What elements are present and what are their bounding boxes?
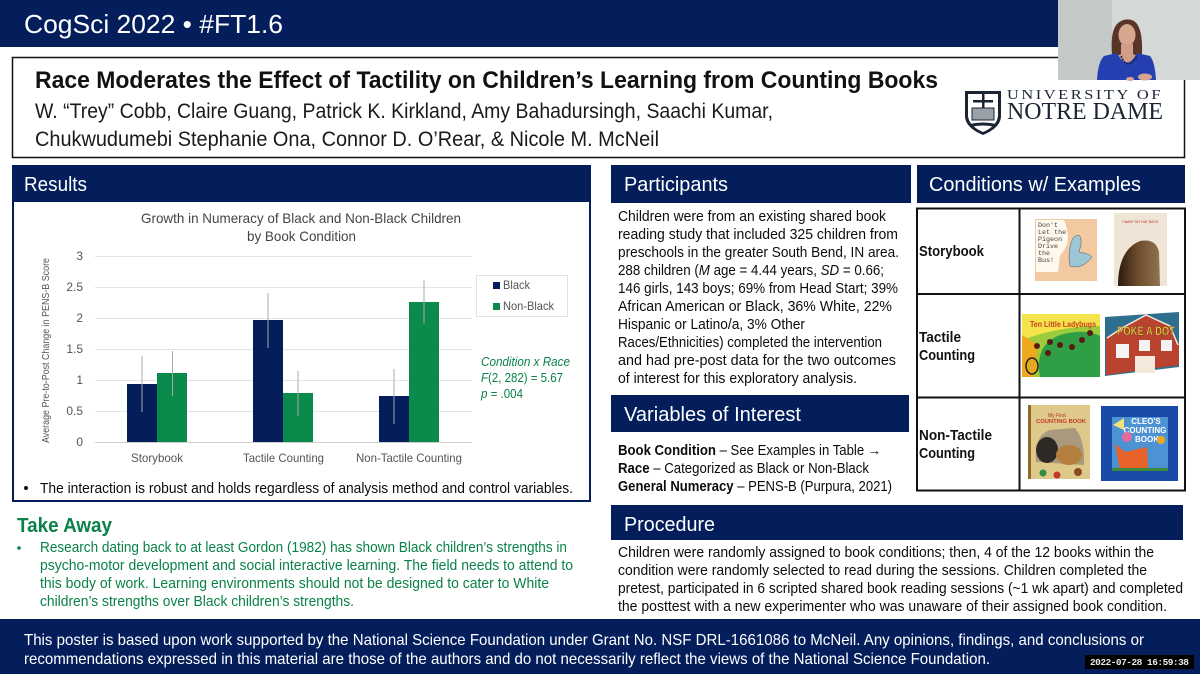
panel: conditions with examples xyxy=(917,165,1185,491)
participants text: Races/Ethnicities) completed the intervention xyxy=(618,335,882,351)
variables text: Book Condition – See Examples in Table → xyxy=(618,443,881,459)
participants header xyxy=(611,165,911,203)
book: pigeon: Don't xyxy=(1038,222,1058,230)
procedure header: Procedure xyxy=(624,514,715,536)
footer: recommendations expressed in this material are those of the authors and do not necessarily reflect the views of the National Science Foundation. xyxy=(24,651,990,668)
book: cleo's counting book: COUNTING xyxy=(1124,426,1166,435)
authors: W. “Trey” Cobb, Claire Guang, Patrick K. Kirkland, Amy Bahadursingh, Saachi Kumar, xyxy=(35,100,773,123)
variables header: Variables of Interest xyxy=(624,404,801,426)
authors: Chukwudumebi Stephanie Ona, Connor D. O’Rear, & Nicole M. McNeil xyxy=(35,128,659,151)
chart title: Growth in Numeracy of Black and Non-Black Children xyxy=(141,210,461,226)
top banner: CogSci 2022 • #FT1.6 xyxy=(24,9,283,39)
variables text: General Numeracy – PENS-B (Purpura, 2021) xyxy=(618,479,892,495)
title panel xyxy=(12,58,1184,158)
book: pigeon xyxy=(1035,219,1097,281)
category labels xyxy=(131,451,462,465)
take away text: this body of work. Learning environments should not be designed to cater to White xyxy=(40,576,549,592)
procedure text: Children were randomly assigned to book conditions; then, 4 of the 12 books within the xyxy=(618,545,1154,561)
participants header: Participants xyxy=(624,174,728,196)
participants text: reading study that included 325 children from xyxy=(618,227,898,243)
logo: University of Notre Dame xyxy=(965,88,1163,135)
top banner xyxy=(0,0,1058,47)
participants text: Hispanic or Latino/a, 3% Other xyxy=(618,317,805,333)
conditions header: Conditions w/ Examples xyxy=(929,174,1141,196)
y axis title: Average Pre-to-Post Change in PENS-B Score xyxy=(40,258,52,443)
book: pigeon: Pigeon xyxy=(1038,236,1062,244)
y axis labels: 0.5 xyxy=(66,404,83,418)
logo: University of Notre Dame: NOTRE DAME xyxy=(1007,99,1163,125)
y axis labels: 0 xyxy=(76,435,83,449)
procedure text xyxy=(618,545,1183,615)
poster title: Race Moderates the Effect of Tactility on Children’s Learning from Counting Books xyxy=(35,67,938,94)
book: pigeon: Bus! xyxy=(1038,257,1054,265)
statistics callout: Condition x Race xyxy=(481,355,570,369)
panel: participants xyxy=(611,165,911,387)
panel: procedure xyxy=(611,505,1183,615)
book: my first counting book xyxy=(1028,405,1090,479)
row label: non-tactile counting: Non-Tactile xyxy=(919,427,992,444)
book: poke-a-dot xyxy=(1105,312,1179,376)
row label: tactile counting xyxy=(919,329,975,364)
y axis labels: 3 xyxy=(76,249,83,263)
book: poke-a-dot: POKE A DOT xyxy=(1117,324,1176,338)
error bars xyxy=(142,280,424,424)
take away heading: Take Away xyxy=(17,515,113,537)
authors xyxy=(35,100,773,151)
procedure text: condition were randomly selected to read during the sessions. Children completed the xyxy=(618,563,1147,579)
results header: Results xyxy=(24,174,87,196)
category labels: Non-Tactile Counting xyxy=(356,451,462,465)
statistics callout xyxy=(480,355,570,401)
book: ten little ladybugs xyxy=(1022,314,1100,377)
book: ten little ladybugs: Ten Little Ladybugs xyxy=(1030,320,1096,329)
book: I want my hat back xyxy=(1114,213,1167,286)
take away text xyxy=(17,540,573,610)
book: cleo's counting book: CLEO'S xyxy=(1131,417,1161,426)
y axis labels: 1.5 xyxy=(66,342,83,356)
book: pigeon: Drive xyxy=(1038,243,1058,251)
participants text: of interest for this exploratory analysis. xyxy=(618,371,857,387)
book: cleo's counting book xyxy=(1101,406,1178,481)
legend: Non-Black xyxy=(503,299,555,313)
row label: tactile counting: Tactile xyxy=(919,329,961,346)
results note: The interaction is robust and holds regardless of analysis method and control variables. xyxy=(40,481,573,497)
statistics callout: F(2, 282) = 5.67 xyxy=(481,371,563,385)
book: I want my hat back: I WANT MY HAT BACK xyxy=(1122,220,1159,224)
conditions header xyxy=(917,165,1185,203)
conditions table xyxy=(917,208,1185,491)
legend xyxy=(476,276,568,316)
participants text: 146 girls, 143 boys; 69% from Head Start; 39% xyxy=(618,281,898,297)
procedure header xyxy=(611,505,1183,540)
participants text: and had pre-post data for the two outcomes xyxy=(618,353,896,369)
panel: take away xyxy=(17,515,573,610)
footer xyxy=(0,619,1200,674)
chart title: by Book Condition xyxy=(247,228,356,244)
book: my first counting book: COUNTING BOOK xyxy=(1036,419,1086,425)
panel: results xyxy=(12,165,591,501)
book: pigeon: the xyxy=(1038,250,1050,258)
y axis labels xyxy=(66,249,83,449)
legend: Black xyxy=(503,278,531,292)
y axis labels: 1 xyxy=(76,373,83,387)
take away text: children’s strengths over Black children’s strengths. xyxy=(40,594,354,610)
statistics callout: p = .004 xyxy=(480,387,523,401)
variables text xyxy=(618,443,892,495)
y axis labels: 2.5 xyxy=(66,280,83,294)
timestamp: 2022-07-28 16:59:38 xyxy=(1090,657,1189,668)
participants text: African American or Black, 36% White, 22% xyxy=(618,299,892,315)
participants text: preschools in the greater South Bend, IN area. xyxy=(618,245,899,261)
row label: non-tactile counting: Counting xyxy=(919,445,975,462)
category labels: Storybook xyxy=(131,451,184,465)
bar chart xyxy=(40,210,570,465)
participants text: 288 children (M age = 4.44 years, SD = 0.66; xyxy=(618,263,884,279)
procedure text: pretest, participated in 6 scripted shared book reading sessions (~1 wk apart) and completed xyxy=(618,581,1183,597)
speaker video xyxy=(1058,0,1200,81)
row label: non-tactile counting xyxy=(919,427,992,462)
variables text: Race – Categorized as Black or Non-Black xyxy=(618,461,870,477)
category labels: Tactile Counting xyxy=(243,451,324,465)
participants text xyxy=(618,209,899,387)
procedure text: the posttest with a new experimenter who was unaware of their assigned book condition. xyxy=(618,599,1167,615)
bars xyxy=(127,302,439,442)
book: cleo's counting book: BOOK xyxy=(1135,435,1159,444)
book: my first counting book: My First xyxy=(1048,413,1066,419)
row label: tactile counting: Counting xyxy=(919,347,975,364)
take away text: psycho-motor development and social interactive learning. The field needs to attend to xyxy=(40,558,573,574)
participants text: Children were from an existing shared book xyxy=(618,209,887,225)
panel: variables of interest xyxy=(611,395,909,495)
row label: storybook: Storybook xyxy=(919,243,985,260)
book: pigeon: Let the xyxy=(1038,229,1066,237)
chart title xyxy=(141,210,461,244)
variables header xyxy=(611,395,909,432)
logo: University of Notre Dame: UNIVERSITY OF xyxy=(1007,88,1163,103)
footer: This poster is based upon work supported by the National Science Foundation under Grant No. NSF DRL-1661086 to McNeil. Any opinions, findings, and conclusions or xyxy=(24,632,1145,649)
take away text: Research dating back to at least Gordon (1982) has shown Black children’s strengths in xyxy=(40,540,567,556)
results header xyxy=(12,165,591,202)
y axis labels: 2 xyxy=(76,311,83,325)
